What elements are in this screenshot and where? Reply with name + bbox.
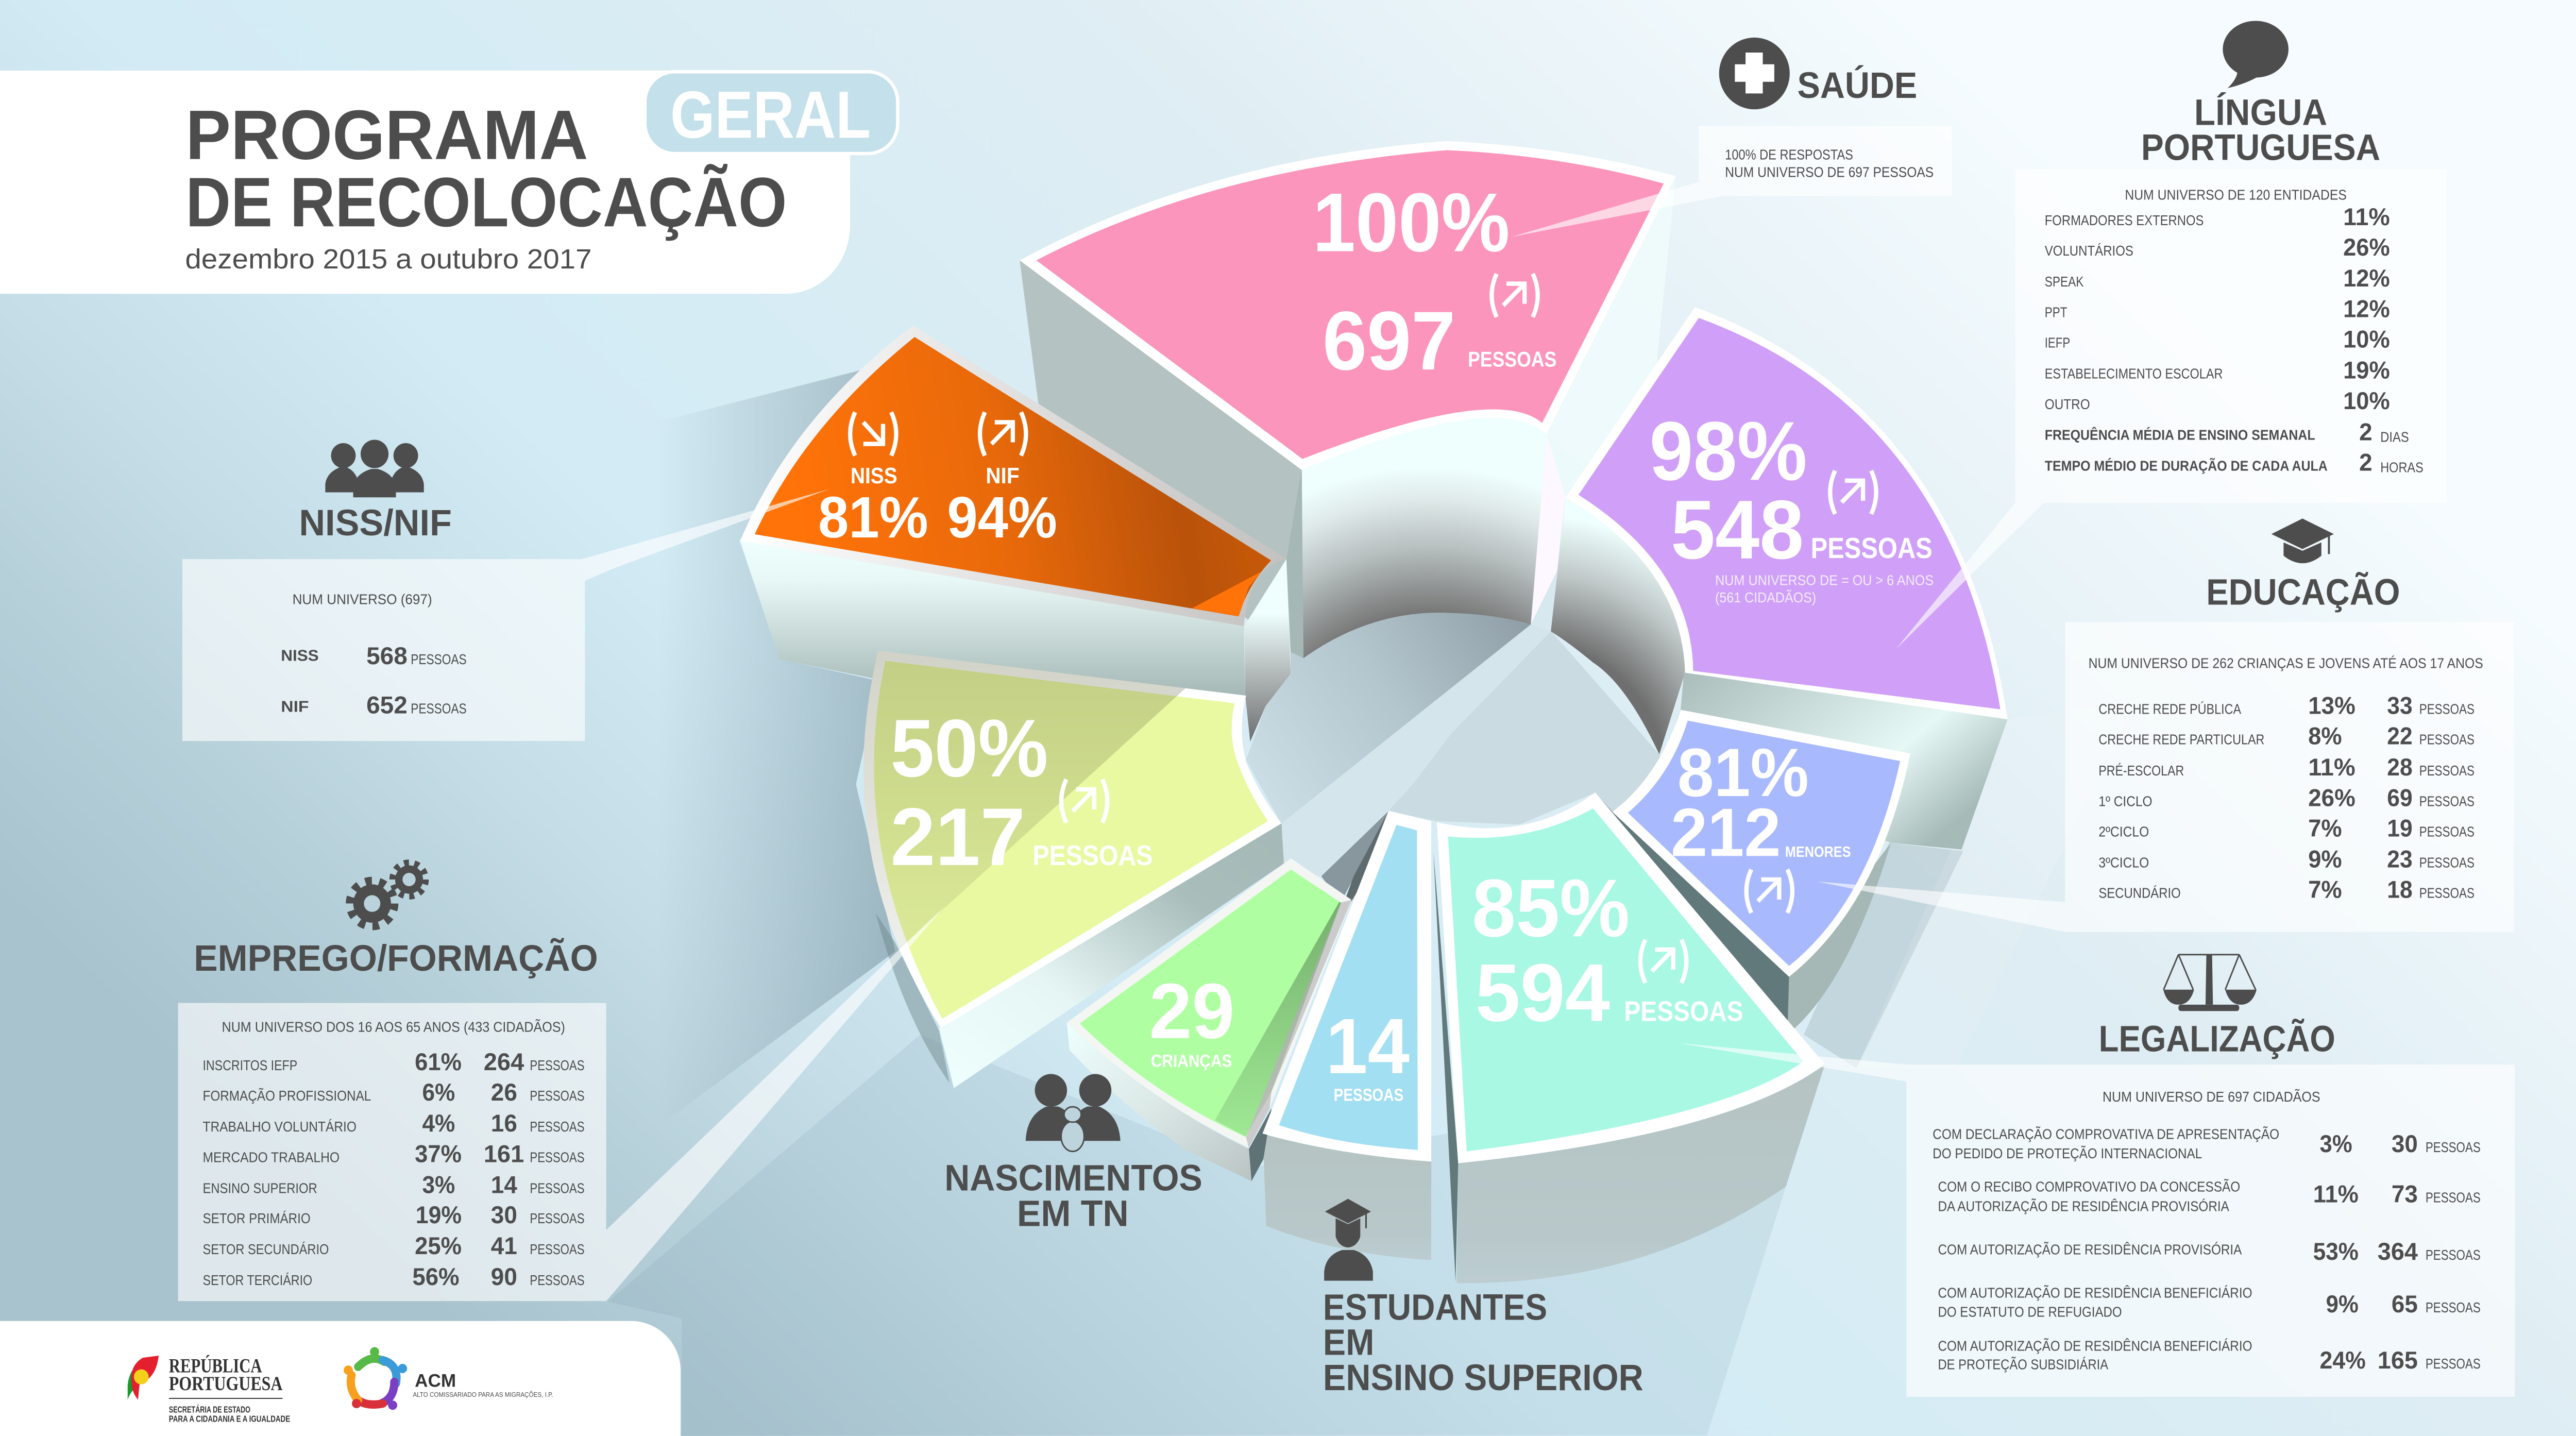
row: setor primário: 30 <box>491 1202 517 1228</box>
badge: geral: GERAL <box>670 78 871 152</box>
row: setor primário <box>202 1202 585 1228</box>
row: frequência média: 2 <box>2359 418 2372 446</box>
row: estatuto de refugiado: DO ESTATUTO DE REFUGIADO <box>1938 1304 2122 1320</box>
row: creche particular: CRECHE REDE PARTICULAR <box>2098 731 2264 748</box>
segment: orange NISS/NIF <box>740 326 1286 626</box>
row: setor secundário: 41 <box>491 1232 517 1259</box>
segment: periwinkle education <box>1613 710 1910 977</box>
row: setor secundário <box>202 1232 585 1259</box>
wall: dark strip beside teal <box>1433 851 1458 1282</box>
row: formadores externos: FORMADORES EXTERNOS <box>2045 212 2204 228</box>
label: green segment values: CRIANÇAS <box>1151 1051 1232 1071</box>
wall: pink segment left side <box>1020 260 1302 651</box>
row: 1º ciclo: 69 <box>2387 784 2413 812</box>
row: frequência média <box>2045 418 2409 446</box>
row: mercado trabalho <box>202 1140 585 1168</box>
row: declaração comprovativa: DO PEDIDO DE PROTEÇÃO INTERNACIONAL <box>1933 1145 2202 1161</box>
wall: periwinkle segment outer <box>1787 843 1891 1035</box>
row: trabalho voluntário: 16 <box>491 1110 517 1137</box>
row: setor terciário: PESSOAS <box>530 1272 585 1288</box>
callout: língua portuguesa panel with pointer <box>1896 169 2446 649</box>
segment: light blue students <box>1263 811 1431 1161</box>
heading: saúde: SAÚDE <box>1798 65 1917 106</box>
row: tempo médio: 2 <box>2359 449 2372 476</box>
row: 2º ciclo: 19 <box>2387 815 2413 842</box>
label: yellow segment values: 50% <box>890 703 1048 794</box>
heading: língua portuguesa: PORTUGUESA <box>2141 127 2380 168</box>
label: periwinkle segment values <box>1671 734 1851 913</box>
row: setor terciário <box>202 1263 585 1290</box>
row: trabalho voluntário: 4% <box>422 1110 455 1137</box>
heading: nascimentos em TN <box>944 1157 1202 1234</box>
row: residência provisória: COM AUTORIZAÇÃO DE RESIDÊNCIA PROVISÓRIA <box>1938 1241 2242 1258</box>
heading: nascimentos em TN: EM TN <box>1017 1193 1129 1234</box>
row: 1º ciclo: 26% <box>2308 784 2355 812</box>
row: tempo médio: TEMPO MÉDIO DE DURAÇÃO DE CADA AULA <box>2045 458 2328 474</box>
section: nascimentos em TN <box>944 1074 1202 1234</box>
row: pré-escolar: PESSOAS <box>2419 763 2475 779</box>
row: recibo comprovativo: COM O RECIBO COMPROVATIVO DA CONCESSÃO <box>1938 1178 2240 1195</box>
subtitle: dezembro 2015 a outubro 2017 <box>185 244 592 275</box>
row: secundário: PESSOAS <box>2419 885 2475 901</box>
text: legalização universe: NUM UNIVERSO DE 697 CIDADÃOS <box>2103 1089 2320 1105</box>
title panel <box>0 71 897 294</box>
row: estabelecimento escolar: 19% <box>2343 357 2390 384</box>
heading: estudantes em ensino superior: EM <box>1323 1322 1374 1363</box>
row: speak: 12% <box>2343 265 2390 292</box>
icon: gears <box>350 863 426 926</box>
heading: estudantes em ensino superior <box>1323 1287 1643 1398</box>
logo: República Portuguesa: PARA A CIDADANIA E A IGUALDADE <box>169 1414 290 1424</box>
central hole of the ring <box>1246 613 1664 876</box>
row: pré-escolar: PRÉ-ESCOLAR <box>2098 763 2184 779</box>
row: creche pública: CRECHE REDE PÚBLICA <box>2098 701 2242 717</box>
icon: parents and baby <box>1026 1074 1121 1152</box>
row: formação profissional: 26 <box>491 1079 517 1106</box>
row: ppt <box>2045 295 2390 322</box>
wall: orange segment inner <box>1245 559 1291 741</box>
row: creche particular <box>2098 722 2475 750</box>
row: creche pública: PESSOAS <box>2419 701 2475 717</box>
segment: green births <box>1067 858 1351 1147</box>
row: setor terciário: 56% <box>412 1263 460 1290</box>
row: proteção subsidiária: 24% <box>2320 1347 2366 1374</box>
row: ensino superior <box>202 1171 585 1198</box>
row: estatuto de refugiado: 9% <box>2326 1291 2359 1317</box>
row: NIF: 652 <box>366 691 408 719</box>
label: purple segment values: PESSOAS <box>1811 531 1933 564</box>
label: orange segment values: NIF <box>986 464 1020 488</box>
row: declaração comprovativa: COM DECLARAÇÃO COMPROVATIVA DE APRESENTAÇÃO <box>1933 1126 2279 1142</box>
section: legalização <box>1933 955 2481 1374</box>
logo: República Portuguesa: PORTUGUESA <box>169 1373 283 1395</box>
label: light blue segment values: PESSOAS <box>1334 1085 1403 1105</box>
wall: orange segment front <box>740 540 1245 696</box>
row: setor primário: PESSOAS <box>530 1210 585 1226</box>
heading: língua portuguesa <box>2141 92 2380 168</box>
row: declaração comprovativa: PESSOAS <box>2426 1139 2481 1155</box>
title: PROGRAMA <box>185 96 588 174</box>
heading: nascimentos em TN: NASCIMENTOS <box>944 1157 1202 1198</box>
row: setor primário: 19% <box>416 1202 462 1228</box>
wall: teal segment front <box>1456 1065 1825 1283</box>
row: creche pública: 33 <box>2387 692 2413 719</box>
row: estabelecimento escolar: ESTABELECIMENTO ESCOLAR <box>2045 365 2223 382</box>
label: yellow segment values <box>890 703 1153 883</box>
logo: ACM <box>344 1347 553 1410</box>
heading: língua portuguesa: LÍNGUA <box>2194 92 2327 132</box>
heading: estudantes em ensino superior: ESTUDANTES <box>1323 1287 1547 1328</box>
row: inscritos IEFP <box>202 1049 585 1075</box>
label: purple segment values: 98% <box>1650 405 1807 498</box>
row: inscritos IEFP: INSCRITOS IEFP <box>202 1057 297 1073</box>
row: ensino superior: 3% <box>422 1171 455 1198</box>
row: outro <box>2045 387 2390 414</box>
row: ensino superior: 14 <box>491 1171 517 1198</box>
label: yellow segment values: PESSOAS <box>1032 839 1153 871</box>
row: NISS <box>281 643 467 669</box>
section: emprego/formação <box>194 863 598 1290</box>
icon: graduation cap <box>2272 518 2334 563</box>
wall: dark side between teal and periwinkle <box>1595 793 1789 1035</box>
callout: emprego panel with pointer <box>178 906 945 1301</box>
label: pink segment values: PESSOAS <box>1468 347 1556 371</box>
heading: NISS/NIF: NISS/NIF <box>299 502 452 543</box>
callout: saúde panel with pointer <box>1511 126 1952 237</box>
label: purple segment values <box>1650 405 1934 605</box>
row: formadores externos: 11% <box>2343 204 2390 230</box>
background shadow rays <box>608 369 2136 1435</box>
logo: ACM: ALTO COMISSARIADO PARA AS MIGRAÇÕES, I.P. <box>413 1391 553 1398</box>
segment: teal legalization <box>1437 792 1825 1163</box>
row: voluntários: 26% <box>2343 234 2390 261</box>
row: NIF: PESSOAS <box>411 700 467 717</box>
row: speak <box>2045 265 2390 292</box>
label: yellow segment values: 217 <box>890 791 1025 883</box>
row: recibo comprovativo: DA AUTORIZAÇÃO DE RESIDÊNCIA PROVISÓRIA <box>1938 1198 2230 1214</box>
label: teal segment values <box>1472 863 1743 1039</box>
label: periwinkle segment values: 212 <box>1671 794 1781 871</box>
row: residência provisória: 364 <box>2378 1238 2418 1265</box>
row: ppt: 12% <box>2343 295 2390 322</box>
text: saúde note: NUM UNIVERSO DE 697 PESSOAS <box>1725 164 1934 180</box>
logo: República Portuguesa: SECRETÁRIA DE ESTADO <box>169 1404 250 1415</box>
row: proteção subsidiária: DE PROTEÇÃO SUBSIDIÁRIA <box>1938 1356 2109 1373</box>
callout: NISS/NIF panel with pointer <box>182 489 829 741</box>
label: pink segment values: 100% <box>1313 176 1510 269</box>
row: outro: OUTRO <box>2045 396 2090 412</box>
section: NISS/NIF <box>281 440 467 719</box>
icon: three people <box>325 440 424 497</box>
row: recibo comprovativo: 11% <box>2313 1180 2359 1208</box>
segment: pink health <box>1020 141 1676 470</box>
row: setor secundário: 25% <box>415 1232 462 1259</box>
heading: legalização: LEGALIZAÇÃO <box>2099 1018 2335 1059</box>
row: pré-escolar: 11% <box>2308 754 2355 781</box>
wall: green segment front <box>1067 1023 1251 1181</box>
row: setor terciário: SETOR TERCIÁRIO <box>202 1272 312 1288</box>
row: creche particular: 22 <box>2387 722 2413 750</box>
row: declaração comprovativa <box>1933 1126 2481 1161</box>
label: orange segment values: 81% <box>818 484 928 550</box>
wall: dark side of green and light blue <box>1249 1108 1272 1181</box>
row: mercado trabalho: PESSOAS <box>530 1149 585 1165</box>
row: 1º ciclo: 1º CICLO <box>2098 793 2153 809</box>
row: inscritos IEFP: 264 <box>484 1049 524 1075</box>
row: outro: 10% <box>2343 387 2390 414</box>
row: speak: SPEAK <box>2045 274 2083 290</box>
row: mercado trabalho: 161 <box>484 1140 524 1168</box>
row: proteção subsidiária <box>1938 1338 2481 1374</box>
row: trabalho voluntário: PESSOAS <box>530 1119 585 1135</box>
row: frequência média: DIAS <box>2380 429 2409 445</box>
row: formadores externos <box>2045 204 2390 230</box>
row: 3º ciclo: 3ºCICLO <box>2098 854 2149 871</box>
icon: graduate <box>1324 1199 1373 1281</box>
row: ensino superior: PESSOAS <box>530 1180 585 1196</box>
heading: educação: EDUCAÇÃO <box>2206 571 2400 613</box>
row: setor secundário: PESSOAS <box>530 1241 585 1257</box>
text: saúde note: 100% DE RESPOSTAS <box>1725 146 1853 162</box>
row: NIF <box>281 691 467 719</box>
row: proteção subsidiária: PESSOAS <box>2426 1356 2481 1372</box>
label: pink segment values: 697 <box>1323 295 1455 387</box>
row: voluntários: VOLUNTÁRIOS <box>2045 243 2133 259</box>
icon: scales <box>2163 955 2257 1011</box>
wall: purple segment lower <box>1659 672 2008 850</box>
row: 2º ciclo: PESSOAS <box>2419 824 2475 840</box>
row: estatuto de refugiado: PESSOAS <box>2426 1299 2481 1315</box>
text: saúde note <box>1725 146 1934 180</box>
wall: pink segment right <box>1531 176 1676 631</box>
segment: purple language <box>1566 307 2008 719</box>
label: teal segment values: 594 <box>1476 947 1610 1039</box>
row: ensino superior: ENSINO SUPERIOR <box>202 1180 317 1196</box>
logo: República Portuguesa <box>128 1355 290 1424</box>
chart: 3D segmented ring <box>740 141 2008 1283</box>
label: orange segment values: NISS <box>851 464 897 488</box>
label: teal segment values: 85% <box>1472 863 1630 954</box>
section: língua portuguesa <box>2045 21 2424 476</box>
section: educação <box>2089 518 2483 903</box>
section: estudantes em ensino superior <box>1323 1199 1643 1398</box>
row: declaração comprovativa: 3% <box>2320 1130 2352 1157</box>
logo: República Portuguesa: REPÚBLICA <box>169 1355 262 1377</box>
row: recibo comprovativo: 73 <box>2392 1180 2418 1208</box>
callout: legalização panel with pointer <box>1679 1043 2515 1397</box>
section: saúde <box>1719 38 1934 180</box>
row: 3º ciclo: 9% <box>2308 846 2342 873</box>
label: periwinkle segment values: 81% <box>1677 734 1809 810</box>
label: purple segment values: NUM UNIVERSO DE = OU > 6 ANOS <box>1715 572 1934 588</box>
row: setor primário: SETOR PRIMÁRIO <box>202 1210 311 1226</box>
wall: light blue segment front <box>1263 1134 1431 1260</box>
row: residência provisória: PESSOAS <box>2426 1247 2481 1263</box>
row: trabalho voluntário <box>202 1110 585 1137</box>
row: 2º ciclo <box>2098 815 2475 842</box>
row: secundário: 7% <box>2308 876 2342 903</box>
row: creche pública <box>2098 692 2475 719</box>
row: frequência média: FREQUÊNCIA MÉDIA DE ENSINO SEMANAL <box>2045 427 2315 443</box>
row: 2º ciclo: 2ºCICLO <box>2098 824 2149 840</box>
row: NIF: NIF <box>281 698 309 716</box>
row: declaração comprovativa: 30 <box>2392 1130 2418 1157</box>
wall: pink segment inner <box>1302 418 1547 658</box>
row: estatuto de refugiado <box>1938 1285 2481 1320</box>
row: NISS: PESSOAS <box>411 651 467 667</box>
row: iefp: IEFP <box>2045 334 2070 351</box>
row: estatuto de refugiado: 65 <box>2392 1291 2418 1317</box>
icon: speech bubble <box>2223 21 2289 88</box>
label: teal segment values: PESSOAS <box>1624 995 1743 1027</box>
title <box>185 96 787 241</box>
label: pink segment values <box>1313 176 1556 387</box>
row: secundário: SECUNDÁRIO <box>2098 885 2181 901</box>
title: DE RECOLOCAÇÃO <box>185 163 787 241</box>
row: formação profissional: PESSOAS <box>530 1088 585 1104</box>
text: língua universe: NUM UNIVERSO DE 120 ENTIDADES <box>2125 187 2347 203</box>
row: setor terciário: 90 <box>491 1263 517 1290</box>
label: purple segment values: (561 CIDADÃOS) <box>1715 589 1816 605</box>
row: iefp <box>2045 326 2390 353</box>
wall: yellow segment front <box>939 823 1284 1088</box>
row: NISS: 568 <box>366 643 408 669</box>
footer panel with logos <box>0 1321 681 1436</box>
row: 3º ciclo: PESSOAS <box>2419 854 2475 871</box>
row: setor secundário: SETOR SECUNDÁRIO <box>202 1241 329 1257</box>
row: residência provisória: 53% <box>2313 1238 2359 1265</box>
row: creche pública: 13% <box>2308 692 2355 719</box>
row: trabalho voluntário: TRABALHO VOLUNTÁRIO <box>202 1119 357 1135</box>
icon: health cross <box>1719 38 1790 109</box>
heading: emprego/formação: EMPREGO/FORMAÇÃO <box>194 937 598 978</box>
row: residência provisória <box>1938 1238 2481 1265</box>
row: formação profissional: FORMAÇÃO PROFISSIONAL <box>202 1088 371 1104</box>
text: emprego universe: NUM UNIVERSO DOS 16 AOS 65 ANOS (433 CIDADÃOS) <box>222 1019 565 1035</box>
row: mercado trabalho: 37% <box>415 1140 462 1168</box>
row: proteção subsidiária: COM AUTORIZAÇÃO DE RESIDÊNCIA BENEFICIÁRIO <box>1938 1338 2252 1354</box>
row: estatuto de refugiado: COM AUTORIZAÇÃO DE RESIDÊNCIA BENEFICIÁRIO <box>1938 1285 2252 1301</box>
row: creche particular: PESSOAS <box>2419 731 2475 748</box>
text: educação universe: NUM UNIVERSO DE 262 CRIANÇAS E JOVENS ATÉ AOS 17 ANOS <box>2089 655 2483 671</box>
callout: educação panel with pointer <box>1817 622 2514 932</box>
wall: purple segment inner <box>1551 497 1685 754</box>
row: 3º ciclo: 23 <box>2387 846 2413 873</box>
segment: yellow employment <box>863 651 1282 1028</box>
row: mercado trabalho: MERCADO TRABALHO <box>202 1149 340 1165</box>
row: inscritos IEFP: PESSOAS <box>530 1057 585 1073</box>
label: purple segment values: 548 <box>1671 484 1804 577</box>
label: orange segment values <box>818 412 1057 550</box>
row: ppt: PPT <box>2045 304 2067 320</box>
logo: ACM: ACM <box>415 1371 456 1391</box>
row: tempo médio: HORAS <box>2380 459 2424 476</box>
row: inscritos IEFP: 61% <box>415 1049 462 1075</box>
text: NISS/NIF universe: NUM UNIVERSO (697) <box>293 591 432 607</box>
row: proteção subsidiária: 165 <box>2378 1347 2418 1374</box>
row: NISS: NISS <box>281 647 319 665</box>
row: voluntários <box>2045 234 2390 261</box>
row: tempo médio <box>2045 449 2424 476</box>
row: pré-escolar <box>2098 754 2475 781</box>
label: periwinkle segment values: MENORES <box>1785 844 1851 860</box>
row: creche particular: 8% <box>2308 722 2342 750</box>
row: secundário <box>2098 876 2475 903</box>
label: green segment values: 29 <box>1149 968 1234 1055</box>
row: 2º ciclo: 7% <box>2308 815 2342 842</box>
row: formação profissional: 6% <box>422 1079 455 1106</box>
row: iefp: 10% <box>2343 326 2390 353</box>
row: 1º ciclo: PESSOAS <box>2419 793 2475 809</box>
row: recibo comprovativo <box>1938 1178 2481 1214</box>
label: light blue segment values: 14 <box>1326 1003 1410 1090</box>
row: secundário: 18 <box>2387 876 2413 903</box>
row: estabelecimento escolar <box>2045 357 2390 384</box>
row: formação profissional <box>202 1079 585 1106</box>
row: pré-escolar: 28 <box>2387 754 2413 781</box>
row: 1º ciclo <box>2098 784 2475 812</box>
heading: estudantes em ensino superior: ENSINO SUPERIOR <box>1323 1357 1643 1398</box>
row: 3º ciclo <box>2098 846 2475 873</box>
row: recibo comprovativo: PESSOAS <box>2426 1190 2481 1206</box>
label: orange segment values: 94% <box>947 484 1057 550</box>
